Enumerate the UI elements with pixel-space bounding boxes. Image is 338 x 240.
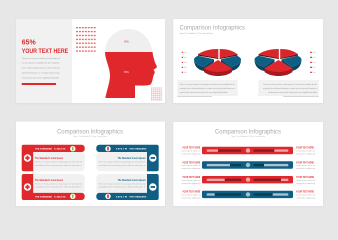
panel: head percentage slide: [16, 19, 165, 103]
title: Comparison Infographics: [180, 24, 246, 32]
text box right: majority have suffered alteration in some form by injected humour or: [263, 87, 317, 90]
card: blue top: There are many variations of passages of Lorem Ipsum: [98, 161, 146, 164]
body paragraph: [22, 57, 61, 80]
body paragraph: have suffered alteration in some form by: [22, 66, 60, 70]
body paragraph: There are many variations of passages of: [22, 57, 61, 60]
card: blue top: The Standard Lorem Ipsum: [118, 157, 146, 160]
label: lower percentage: 65%: [124, 71, 130, 74]
text box right: [258, 80, 319, 97]
subtitle: Type The Subtitle Of Your Great Here: [180, 32, 214, 35]
subtitle: Type The Subtitle Of Your Great Here: [231, 135, 266, 138]
card: blue top: THE STANDARD: [129, 148, 147, 151]
card: red top: available but the majority have suffered alteration in: [35, 164, 82, 167]
card: red top: $ 365.5 M: [54, 149, 66, 151]
row 1: YOUR TEXT HERE: [182, 147, 201, 150]
row 1: Lorem Ipsum dolor sit: [181, 150, 201, 153]
row 2: [181, 161, 316, 170]
card: blue bottom: The Standard Lorem Ipsum: [118, 179, 146, 182]
legend right: [310, 51, 316, 74]
row 1: consectetur adipiscing: [296, 153, 315, 156]
heading: your text here: YOUR TEXT HERE: [22, 49, 68, 55]
label: upper percentage: 35%: [124, 41, 130, 44]
row 1: YOUR TEXT HERE: [296, 147, 314, 150]
text box right: randomised words which dont look even slightly believable: [268, 91, 318, 94]
card: blue bottom: [96, 174, 159, 200]
legend left: Text: [184, 61, 187, 64]
left text column background: [16, 19, 72, 103]
card: red top: The Standard Lorem Ipsum: [35, 157, 63, 160]
card: red top: [22, 145, 85, 171]
card: red bottom: [22, 174, 85, 200]
3D pie chart left: [194, 49, 241, 76]
panel: pie comparison slide: [173, 19, 323, 103]
legend left: [182, 51, 187, 74]
row 4: Lorem Ipsum dolor sit: [181, 194, 201, 197]
row 4: [181, 191, 316, 200]
row 3: [181, 176, 316, 185]
panel: standard cards slide: [16, 122, 165, 206]
card: red bottom: $ 365.5 M: [54, 196, 66, 198]
body paragraph: injected humour or randomised words: [22, 72, 60, 74]
row 1: consectetur adipiscing: [181, 153, 200, 156]
body paragraph: Lorem Ipsum available but the majority: [22, 62, 59, 64]
row 4: Lorem Ipsum dolor sit: [296, 194, 316, 197]
row 3: Lorem Ipsum dolor sit: [181, 179, 201, 182]
row 4: YOUR TEXT HERE: [296, 191, 314, 194]
text box left: [177, 80, 238, 97]
card: red bottom: THE STANDARD: [35, 195, 53, 198]
legend right: Text: [312, 71, 316, 74]
row 1: [181, 147, 316, 156]
legend right: Text: [312, 66, 316, 69]
legend left: Text: [184, 56, 187, 59]
row 3: consectetur adipiscing: [296, 182, 315, 185]
row 2: Lorem Ipsum dolor sit: [296, 164, 316, 167]
legend left: Text: [184, 51, 187, 54]
subtitle: Type The Subtitle Of Your Great Here: [73, 135, 108, 138]
legend right: Text: [312, 61, 316, 64]
accent bar: [22, 83, 56, 85]
row 4: consectetur adipiscing: [181, 197, 200, 200]
row 3: YOUR TEXT HERE: [182, 176, 201, 179]
card: blue top: [96, 145, 159, 171]
dot grid: [76, 27, 96, 52]
card: blue bottom: There are many variations of passages of Lorem Ipsum: [98, 182, 146, 185]
row 3: consectetur adipiscing: [181, 182, 200, 185]
card: red bottom: available but the majority have suffered alteration in: [35, 186, 82, 189]
card: red bottom: The Standard Lorem Ipsum: [35, 179, 63, 182]
card: red bottom: There are many variations of passages of Lorem Ipsum: [35, 182, 82, 185]
card: red top: There are many variations of passages of Lorem Ipsum: [35, 161, 82, 164]
legend right: Text: [312, 56, 316, 59]
row 2: consectetur adipiscing: [296, 167, 315, 170]
row 2: YOUR TEXT HERE: [182, 161, 201, 164]
panel: progress bars slide: [173, 122, 323, 206]
head chart: [105, 29, 157, 98]
row 3: Lorem Ipsum dolor sit: [296, 179, 316, 182]
mesh decoration: [151, 87, 162, 101]
row 2: YOUR TEXT HERE: [296, 161, 314, 164]
title: Comparison Infographics: [215, 128, 282, 136]
text box left: There are many variations of passages of Lorem Ipsum available but the: [180, 83, 236, 86]
legend right: Text: [312, 51, 316, 54]
card: blue top: $ 873.7 M: [116, 149, 127, 151]
row 4: consectetur adipiscing: [296, 197, 315, 200]
title: Comparison Infographics: [57, 128, 124, 136]
text box right: There are many variations of passages of Lorem Ipsum available but the: [263, 83, 318, 86]
card: red top: THE STANDARD: [35, 148, 53, 151]
legend left: Text: [184, 66, 187, 69]
percentage heading: 65%: [22, 38, 36, 46]
text box left: majority have suffered alteration in some form by injected humour or: [180, 87, 235, 90]
3D pie chart right: [254, 49, 302, 76]
row 2: consectetur adipiscing: [181, 167, 200, 170]
row 4: YOUR TEXT HERE: [182, 191, 201, 194]
card: blue bottom: available but the majority have suffered alteration in: [98, 186, 146, 189]
card: blue bottom: THE STANDARD: [129, 195, 147, 198]
text box left: randomised words which dont look even slightly believable: [180, 91, 228, 94]
row 1: Lorem Ipsum dolor sit: [296, 150, 316, 153]
row 2: Lorem Ipsum dolor sit: [181, 164, 201, 167]
legend left: Text: [184, 71, 187, 74]
card: blue top: available but the majority have suffered alteration in: [98, 164, 146, 167]
row 3: YOUR TEXT HERE: [296, 176, 314, 179]
card: blue bottom: $ 873.7 M: [116, 196, 127, 198]
body paragraph: which dont look even slightly believable: [22, 76, 60, 80]
